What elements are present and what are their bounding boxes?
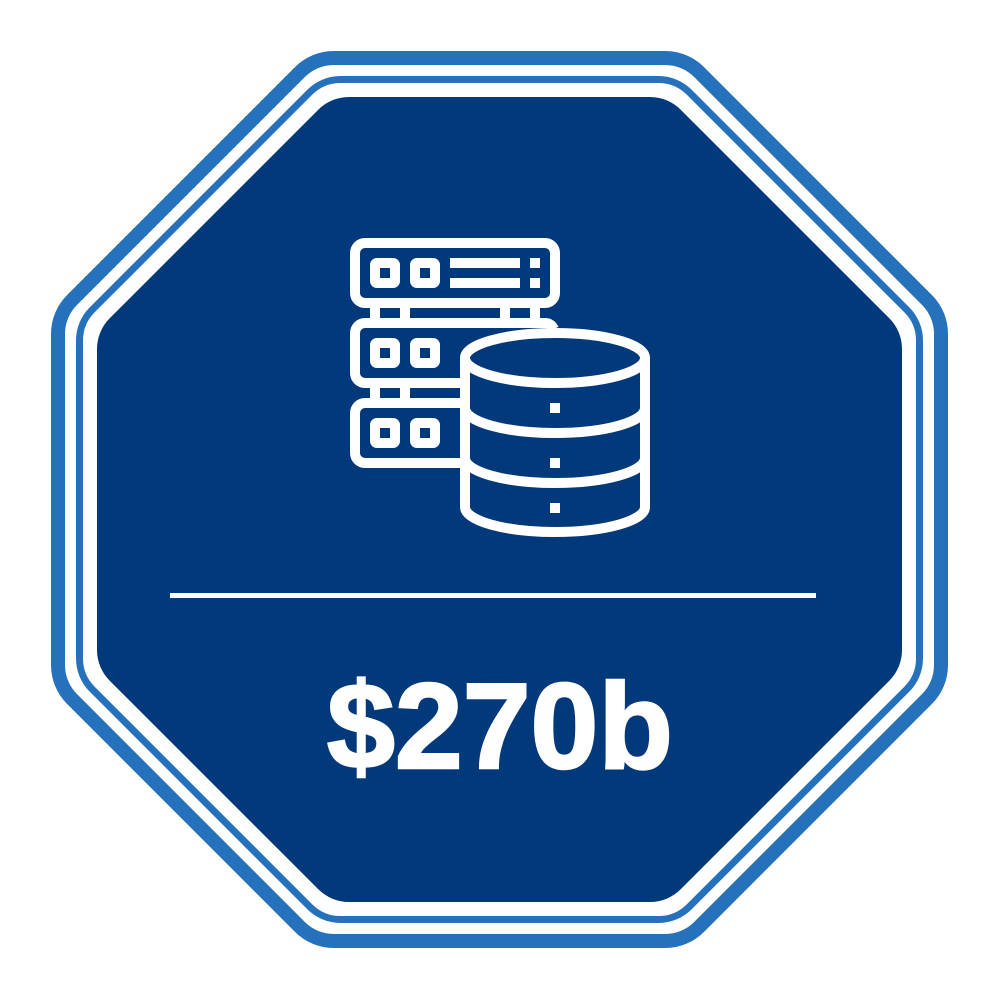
divider line (170, 593, 816, 598)
bottom server unit (355, 403, 462, 463)
middle server unit (355, 323, 554, 383)
icon: database cylinder (465, 333, 645, 532)
middle octagon border (80, 80, 920, 920)
stat value: $270b (327, 658, 673, 794)
top server unit (355, 243, 555, 303)
navy octagon panel (97, 97, 902, 902)
icon: server rack (355, 243, 555, 463)
rack connectors (370, 307, 540, 399)
outer octagon border (58, 58, 941, 941)
icon: servers and database (355, 243, 645, 532)
